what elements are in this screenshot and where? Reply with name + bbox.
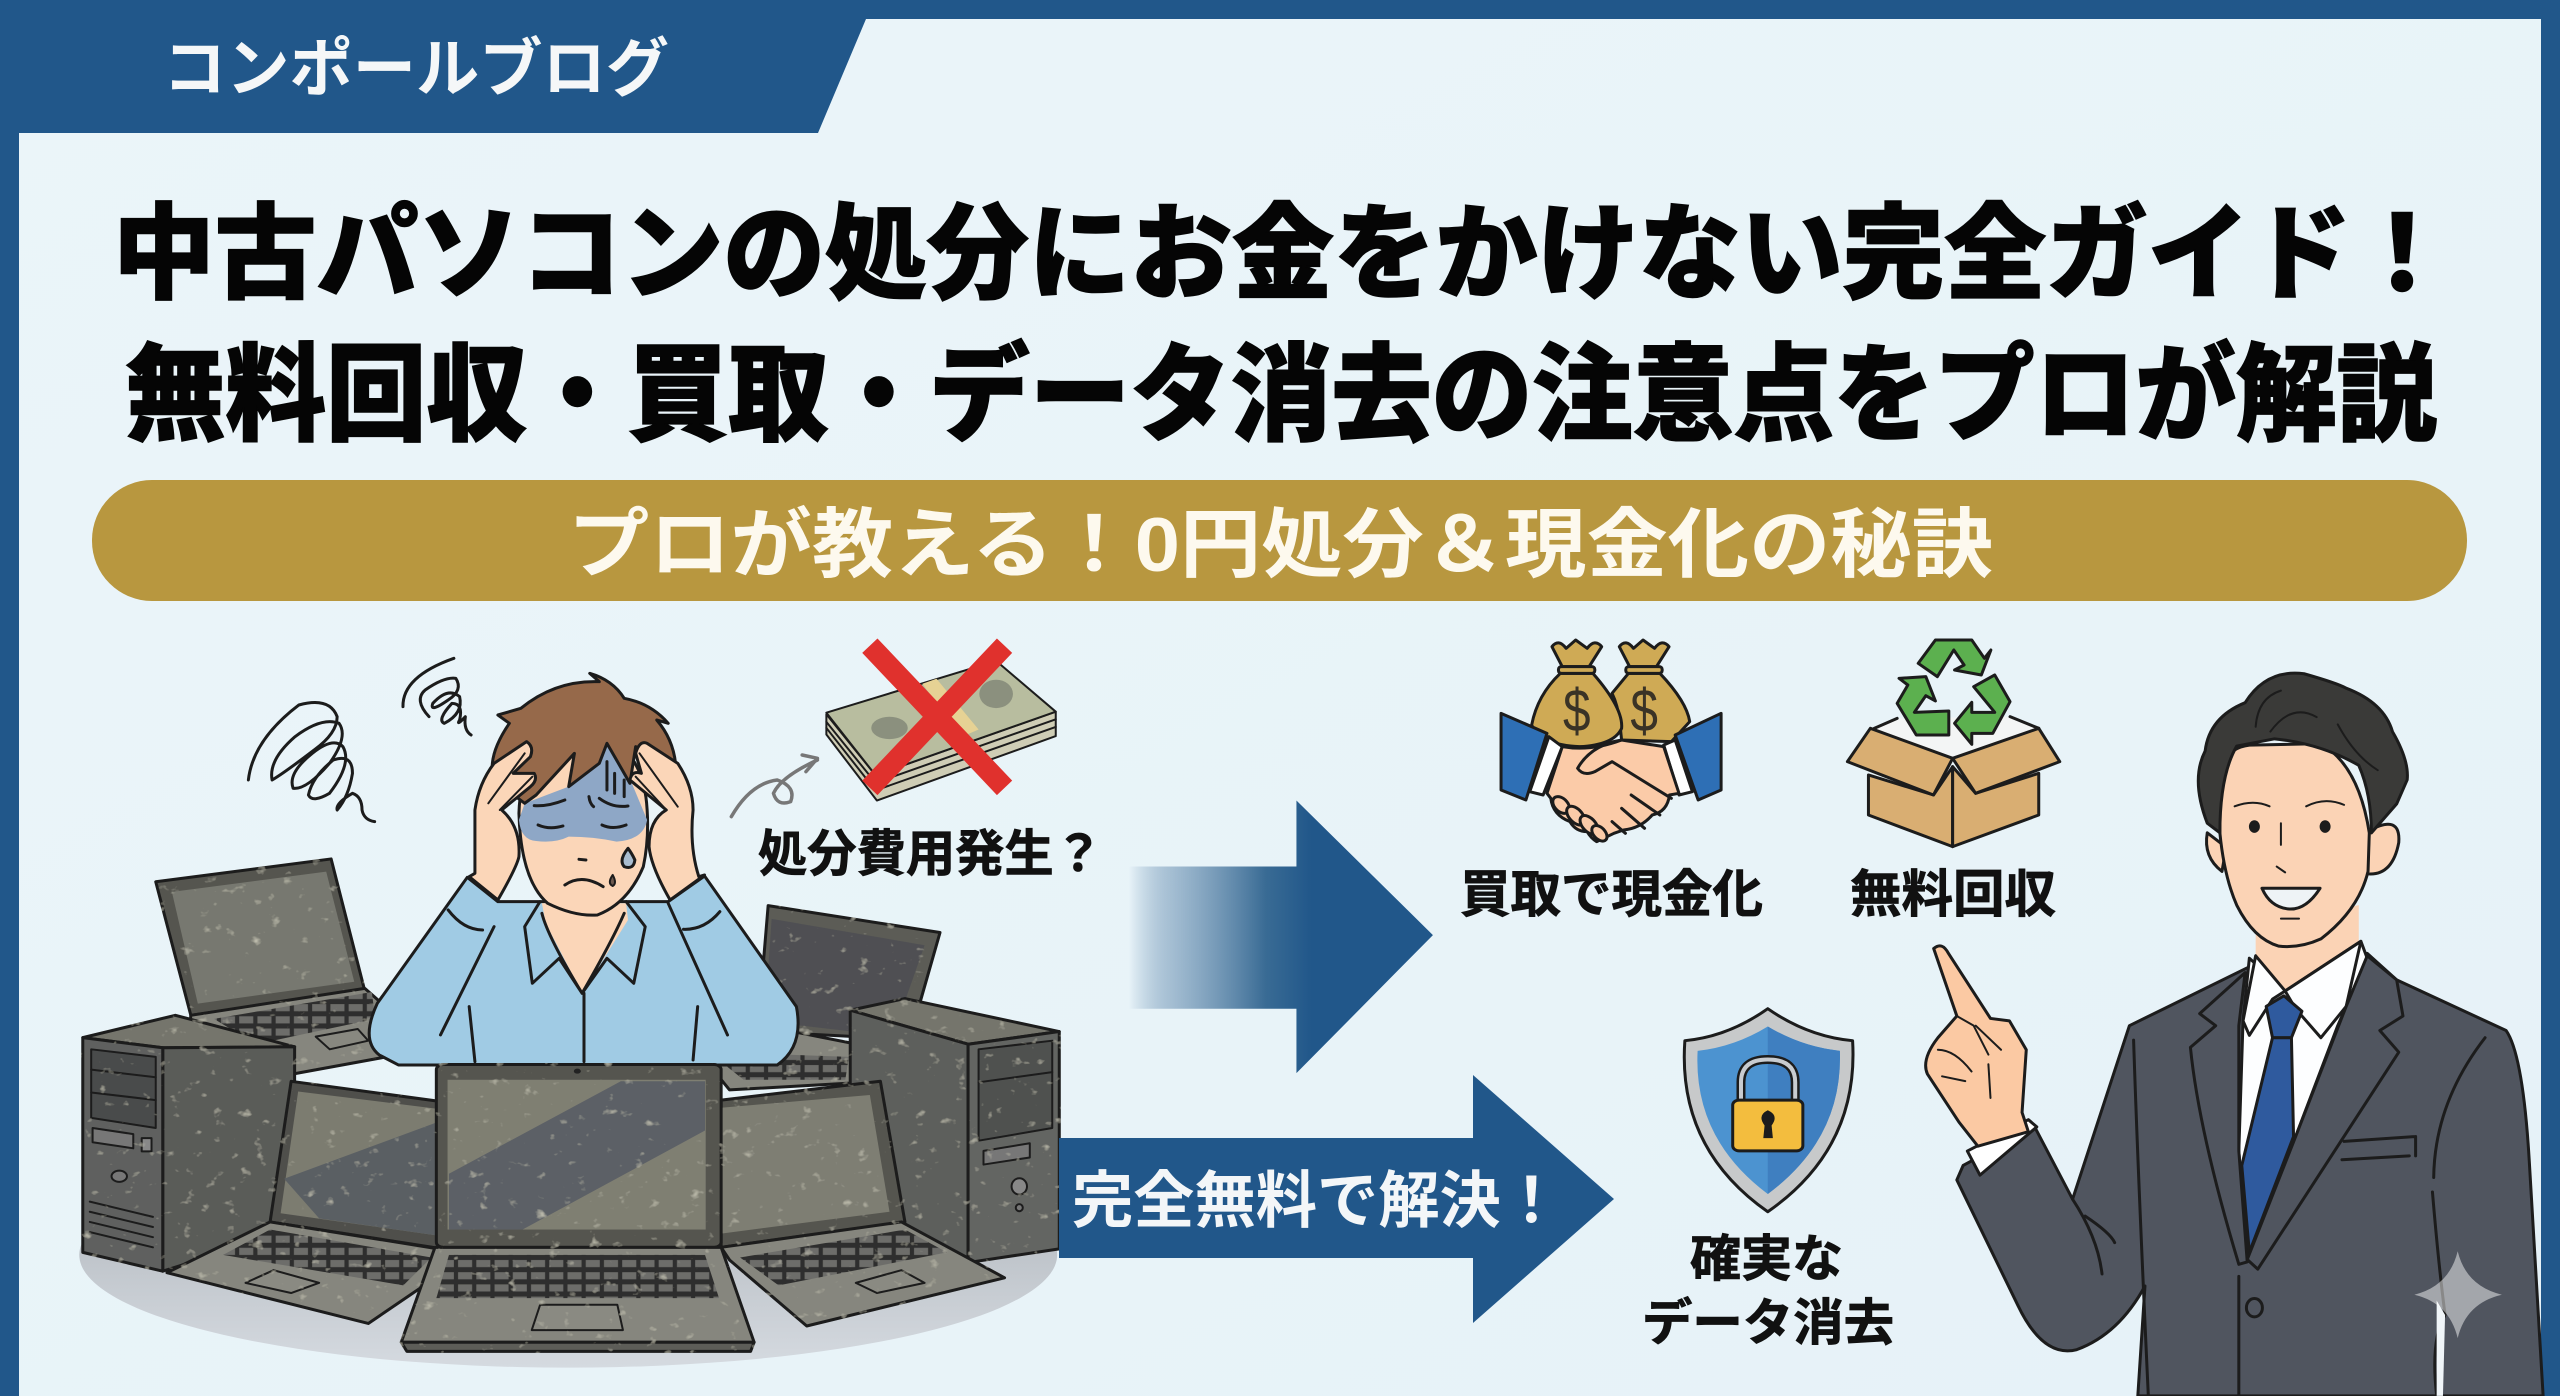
title xyxy=(113,197,2453,455)
shirt xyxy=(369,876,798,1065)
gold subtitle banner xyxy=(92,480,2467,601)
label: disposal cost question: 処分費用発生？ xyxy=(758,826,1103,882)
icon: money bags and handshake: $ xyxy=(1630,677,1658,744)
hands on head xyxy=(469,742,705,900)
arrow: fading blue arrow xyxy=(1129,801,1433,1073)
labels under solution icons: 無料回収 xyxy=(1850,866,2056,923)
lapels and suit seams xyxy=(2073,956,2485,1396)
stress scribbles xyxy=(248,658,471,822)
pointing hand and cuff xyxy=(1926,946,2037,1175)
labels under solution icons xyxy=(1460,866,2056,1351)
illustration: back row of old computers xyxy=(79,859,1059,1368)
illustration: worried man with stress scribbles xyxy=(248,658,817,1065)
icons: buyback and free collection xyxy=(1501,640,2060,847)
left desktop tower xyxy=(83,1015,295,1271)
hair xyxy=(492,673,676,803)
icon: money bags and handshake: $ xyxy=(1563,677,1591,744)
icon: recycling box xyxy=(1847,640,2060,847)
illustration: banknotes and front row of laptops xyxy=(167,646,1056,1351)
cost arrow xyxy=(731,755,817,817)
labels under solution icons: 確実な xyxy=(1690,1231,1843,1287)
watermark sparkle xyxy=(2414,1251,2502,1338)
labels under solution icons: データ消去 xyxy=(1642,1295,1894,1351)
front right laptop xyxy=(721,1081,1005,1326)
icon: banknotes with red cross xyxy=(826,646,1056,801)
arrow: solution arrow xyxy=(1059,1075,1614,1323)
arrow: solution arrow: 完全無料で解決！ xyxy=(1072,1167,1562,1236)
front center laptop xyxy=(401,1065,754,1351)
icon: security shield with padlock xyxy=(1684,1009,1853,1212)
title: 中古パソコンの処分にお金をかけない完全ガイド！ xyxy=(113,197,2453,313)
suit xyxy=(1957,953,2543,1396)
back right laptop xyxy=(694,906,940,1090)
title: 無料回収・買取・データ消去の注意点をプロが解説 xyxy=(125,337,2437,455)
illustration: businessman pointing xyxy=(1926,673,2543,1396)
gold subtitle banner: プロが教える！0円処分＆現金化の秘訣 xyxy=(568,503,1993,588)
necktie xyxy=(2242,996,2302,1252)
head with gloom xyxy=(519,733,648,915)
shirt xyxy=(2239,941,2367,1257)
neck xyxy=(2256,905,2359,992)
labels under solution icons: 買取で現金化 xyxy=(1460,866,1763,923)
icon: money bags and handshake xyxy=(1501,640,1721,843)
right desktop tower xyxy=(850,999,1059,1263)
head xyxy=(2198,673,2407,947)
front left laptop xyxy=(167,1081,449,1323)
back left laptop xyxy=(156,859,414,1076)
tab label: blog name: コンポールブログ xyxy=(163,33,669,105)
floor shadow xyxy=(79,1142,1057,1368)
